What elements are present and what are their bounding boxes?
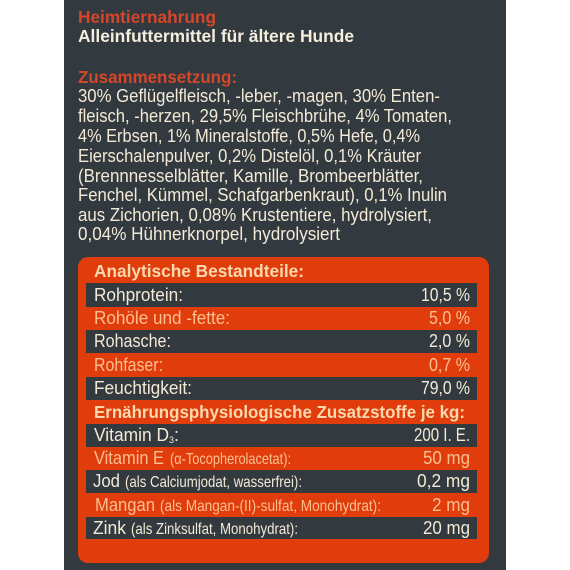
composition ingredient list xyxy=(78,86,452,244)
row: Mangan: Mangan xyxy=(95,495,155,515)
row: Vitamin E: 50 mg xyxy=(423,448,470,468)
composition ingredient list: fleisch, -herzen, 29,5% Fleischbrühe, 4% Tomaten, xyxy=(78,106,452,126)
row: Jod xyxy=(86,470,477,493)
orange panel background xyxy=(78,257,489,563)
row: Rohfaser: 0,7 % xyxy=(429,355,470,375)
row: Mangan: (als Mangan-(II)-sulfat, Monohydrat): xyxy=(160,498,381,515)
row: Feuchtigkeit: 79,0 % xyxy=(421,378,470,398)
row: Vitamin E: Vitamin E xyxy=(94,448,164,468)
row: Vitamin E xyxy=(94,448,470,468)
additives heading: Ernährungsphysiologische Zusatzstoffe je kg: xyxy=(94,402,465,422)
row: Rohprotein: 10,5 % xyxy=(421,285,470,305)
row: Zink xyxy=(86,517,477,539)
product heading xyxy=(78,7,354,46)
row: Rohfaser xyxy=(94,355,470,375)
row: Rohasche: 2,0 % xyxy=(429,331,470,351)
analytical heading: Analytische Bestandteile: xyxy=(94,261,304,281)
row: Rohprotein: Rohprotein: xyxy=(94,285,183,305)
composition text block xyxy=(78,67,452,244)
composition ingredient list: 30% Geflügelfleisch, -leber, -magen, 30% Enten- xyxy=(78,86,440,106)
dark background panel xyxy=(64,0,506,570)
composition ingredient list: Fenchel, Kümmel, Schafgarbenkraut), 0,1% Inulin xyxy=(78,185,447,205)
panel: nutrition table xyxy=(78,257,489,563)
row: Vitamin D3: 200 I. E. xyxy=(414,425,470,445)
row: Rohasche: Rohasche: xyxy=(94,331,171,351)
row: Vitamin D3 xyxy=(86,424,477,447)
row: Rohprotein xyxy=(86,283,477,307)
composition ingredient list: 0,04% Hühnerknorpel, hydrolysiert xyxy=(78,224,340,244)
row: Feuchtigkeit: Feuchtigkeit: xyxy=(94,378,192,398)
composition ingredient list: 4% Erbsen, 1% Mineralstoffe, 0,5% Hefe, 0,4% xyxy=(78,126,420,146)
category heading: Heimtiernahrung xyxy=(78,7,216,27)
row: Mangan xyxy=(95,495,470,515)
row: Zink: Zink xyxy=(93,518,127,538)
row: Rohasche xyxy=(86,330,477,353)
composition ingredient list: (Brennnesselblätter, Kamille, Brombeerblätter, xyxy=(78,166,423,186)
row: Vitamin E: (α-Tocopherolacetat): xyxy=(170,451,291,468)
row: Rohöle und -fette xyxy=(94,308,470,328)
row: Rohöle und -fette: 5,0 % xyxy=(429,308,470,328)
row: Zink: (als Zinksulfat, Monohydrat): xyxy=(131,521,298,538)
row: Mangan: 2 mg xyxy=(432,495,470,515)
composition heading: Zusammensetzung: xyxy=(78,67,237,87)
row: Rohöle und -fette: Rohöle und -fette: xyxy=(94,308,230,328)
composition ingredient list: Eierschalenpulver, 0,2% Distelöl, 0,1% Kräuter xyxy=(78,146,421,166)
row: Jod: (als Calciumjodat, wasserfrei): xyxy=(125,474,302,491)
row: Vitamin D3: Vitamin D xyxy=(94,425,169,445)
row: Vitamin D3: : xyxy=(174,425,179,445)
product subtitle: Alleinfuttermittel für ältere Hunde xyxy=(78,26,354,46)
row: Feuchtigkeit xyxy=(86,377,477,400)
row: Rohfaser: Rohfaser: xyxy=(94,355,163,375)
row: Jod: Jod xyxy=(93,471,120,491)
row: Jod: 0,2 mg xyxy=(417,471,470,491)
row: Vitamin D3: 3 xyxy=(169,435,174,445)
composition ingredient list: aus Zichorien, 0,08% Krustentiere, hydrolysiert, xyxy=(78,205,432,225)
row: Zink: 20 mg xyxy=(423,518,470,538)
